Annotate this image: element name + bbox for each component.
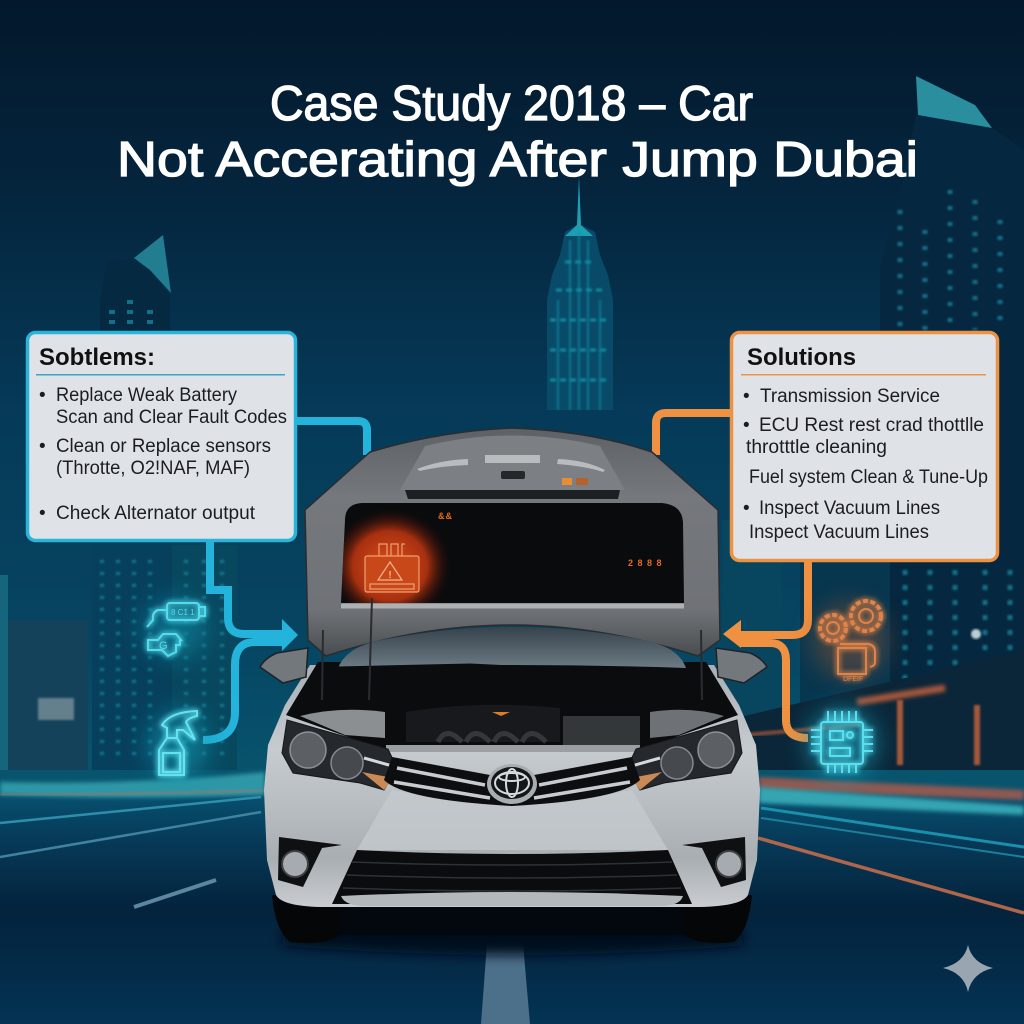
- icon: sparkle watermark: [943, 945, 993, 992]
- car: [260, 428, 767, 955]
- road: [0, 795, 1024, 1024]
- hood status glyphs: 2 8 8 8: [628, 558, 663, 568]
- solution list: throtttle cleaning: [746, 437, 887, 458]
- shadow and tyres: [272, 895, 752, 955]
- right-side mid buildings: [722, 520, 981, 730]
- logo: [487, 764, 537, 804]
- icon: gears and ECU: [812, 601, 888, 683]
- lower grille: [332, 850, 692, 906]
- open hood: [305, 428, 720, 700]
- warning ECU icon: [365, 544, 419, 592]
- right tower: [880, 76, 1024, 720]
- heading: solutions: Solutions: [747, 344, 856, 371]
- left headlight: [282, 720, 397, 790]
- left mirror: [260, 648, 308, 683]
- solution list: Fuel system Clean & Tune-Up: [749, 467, 988, 488]
- light streaks and lane lines: [0, 768, 1024, 1024]
- left tower: [100, 235, 171, 540]
- right fog lamp: [682, 837, 746, 887]
- solution list: Inspect Vacuum Lines: [759, 498, 940, 519]
- problem list: Check Alternator output: [56, 503, 256, 524]
- icon: battery and engine: [143, 598, 207, 658]
- problem list: Replace Weak Battery: [56, 385, 237, 406]
- icon: gears and ECU: DFEIF: [843, 676, 863, 683]
- solution list: Inspect Vacuum Lines: [749, 522, 929, 543]
- title: Not Accerating After Jump Dubai: [117, 133, 918, 187]
- icon: battery and engine: G: [159, 640, 168, 652]
- solution list: ECU Rest rest crad thottlle: [759, 415, 984, 436]
- engine bay: [286, 662, 738, 752]
- hood struts: [322, 598, 702, 700]
- Dubai skyline: [0, 76, 1024, 770]
- central spire tower: [547, 177, 613, 410]
- connector: solutions to hood: [656, 413, 808, 738]
- right mirror: [716, 648, 767, 683]
- icon: spray bottle: [148, 711, 208, 779]
- panel: problems: [28, 332, 296, 540]
- panel: solutions: [732, 332, 998, 560]
- problem list: Clean or Replace sensors: [56, 436, 271, 457]
- problem list: •: [39, 385, 46, 406]
- hood status glyphs: [438, 478, 663, 568]
- hood status glyphs: &&: [438, 511, 453, 521]
- solution list: Transmission Service: [760, 386, 940, 407]
- right headlight: [627, 720, 742, 790]
- problem list: •: [39, 436, 46, 457]
- windscreen: [338, 627, 686, 668]
- connector: problems to hood: [203, 421, 367, 740]
- heading: problems: Sobtlems:: [39, 344, 155, 371]
- warning ECU icon: !: [388, 570, 392, 581]
- solution list: •: [743, 415, 750, 436]
- title: [117, 77, 918, 187]
- solution list: [743, 386, 988, 543]
- problem list: [39, 385, 287, 524]
- icon: battery and engine: 8 C1 1: [171, 608, 195, 617]
- solution list: •: [743, 386, 750, 407]
- left fog lamp: [278, 837, 342, 887]
- title: Case Study 2018 – Car: [270, 77, 753, 131]
- bumper highlight: [357, 790, 668, 850]
- problem list: •: [39, 503, 46, 524]
- car body: [264, 665, 760, 907]
- problem list: Scan and Clear Fault Codes: [56, 407, 287, 428]
- overpass with orange light: [740, 650, 1024, 770]
- solution list: •: [743, 498, 750, 519]
- icon: circuit chip: [806, 707, 878, 779]
- lower-left buildings: [0, 540, 237, 770]
- problem list: (Throtte, O2!NAF, MAF): [56, 458, 250, 479]
- upper grille: [384, 757, 640, 806]
- under-hood insulation panel: [341, 503, 684, 608]
